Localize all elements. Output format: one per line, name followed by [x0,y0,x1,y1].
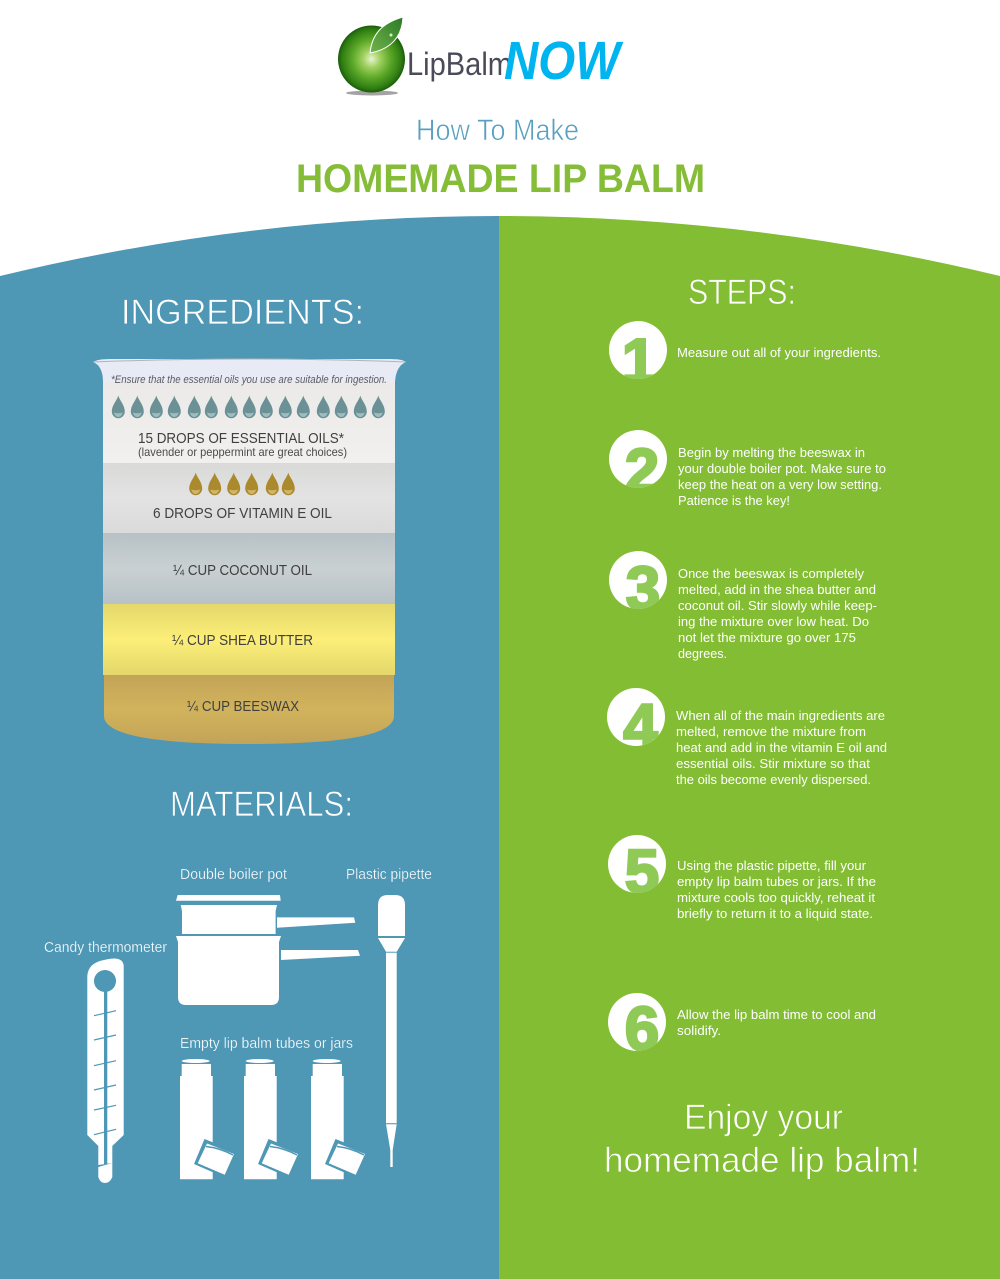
step 5: 5 [625,838,659,907]
step 4: heat and add in the vitamin E oil and [676,741,887,755]
step 1 [609,321,880,379]
step 5: empty lip balm tubes or jars. If the [677,875,876,889]
step 2 [609,430,886,508]
step 3: ing the mixture over low heat. Do [678,615,869,629]
step 6: solidify. [677,1024,721,1038]
label: candy thermometer: Candy thermometer [44,939,167,956]
step 4: 4 [623,692,658,761]
label: oil choices: (lavender or peppermint are great choices) [138,445,347,459]
step 3: coconut oil. Stir slowly while keep- [678,599,877,613]
step 3: Once the beeswax is completely [678,567,865,581]
step 3: degrees. [678,647,727,661]
label: double boiler pot: Double boiler pot [180,866,288,883]
title: How To Make: How To Make [416,114,579,147]
logo: NOW [504,31,624,91]
step 4: essential oils. Stir mixture so that [676,757,871,771]
step 4: the oils become evenly dispersed. [676,773,871,787]
layer: beeswax [104,675,394,744]
step 4 [607,688,887,787]
closing message: Enjoy your [684,1098,843,1137]
label: plastic pipette: Plastic pipette [346,866,432,883]
closing message: homemade lip balm! [604,1141,920,1180]
beaker chart of ingredients [93,359,406,744]
step 4: When all of the main ingredients are [676,709,885,723]
step 5: mixture cools too quickly, reheat it [677,891,876,905]
step 6: Allow the lip balm time to cool and [677,1008,876,1022]
step 2: Patience is the key! [678,494,790,508]
icons: 6 vitamin E drops [189,472,295,495]
logo [338,17,624,96]
step 6 [608,993,876,1051]
step 1: 1 [622,327,656,396]
step 4: melted, remove the mixture from [676,725,866,739]
label: tubes or jars: Empty lip balm tubes or jars [180,1035,353,1052]
icon: lip balm tube 3 [311,1059,368,1179]
title: Homemade Lip Balm: HOMEMADE LIP BALM [296,157,705,201]
icons: 15 essential oil drops [112,396,385,418]
beaker rim and note area [93,359,406,382]
layer: shea butter [103,604,395,675]
layer: coconut oil [103,533,395,604]
step 2: 2 [625,437,659,506]
panel: blue left background [0,216,499,1279]
step 3: melted, add in the shea butter and [678,583,876,597]
icon: candy thermometer [87,958,124,1183]
step 5: briefly to return it to a liquid state. [677,907,873,921]
panel: green right background [499,216,1000,1279]
note: essential oils warning: *Ensure that the essential oils you use are suitable for ingestion. [111,374,387,386]
step 2: Begin by melting the beeswax in [678,446,865,460]
closing message [604,1098,920,1180]
layer: vitamin E oil [103,463,395,533]
label: coconut oil: ¼ CUP COCONUT OIL [173,562,312,579]
step 5: Using the plastic pipette, fill your [677,859,866,873]
icon: lip balm tube 2 [244,1059,301,1179]
step 3 [609,551,877,661]
label: vitamin E: 6 DROPS OF VITAMIN E OIL [153,505,332,522]
heading: materials: MATERIALS: [170,785,353,824]
step 3: not let the mixture go over 175 [678,631,856,645]
heading: ingredients: INGREDIENTS: [121,293,364,332]
step 6: 6 [625,995,659,1064]
logo: LipBalm [407,46,512,82]
label: essential oils: 15 DROPS OF ESSENTIAL OILS* [138,430,344,447]
step 3: 3 [626,555,660,624]
label: shea butter: ¼ CUP SHEA BUTTER [172,632,313,649]
step 2: your double boiler pot. Make sure to [678,462,886,476]
step 2: keep the heat on a very low setting. [678,478,882,492]
step 1: Measure out all of your ingredients. [677,346,881,360]
heading: steps: STEPS: [688,273,796,312]
icon: double boiler pot [176,895,360,1005]
label: beeswax: ¼ CUP BEESWAX [187,698,299,715]
icon: lip balm tube 1 [180,1059,237,1179]
icon: plastic pipette [378,895,405,1167]
step 5 [608,835,876,921]
